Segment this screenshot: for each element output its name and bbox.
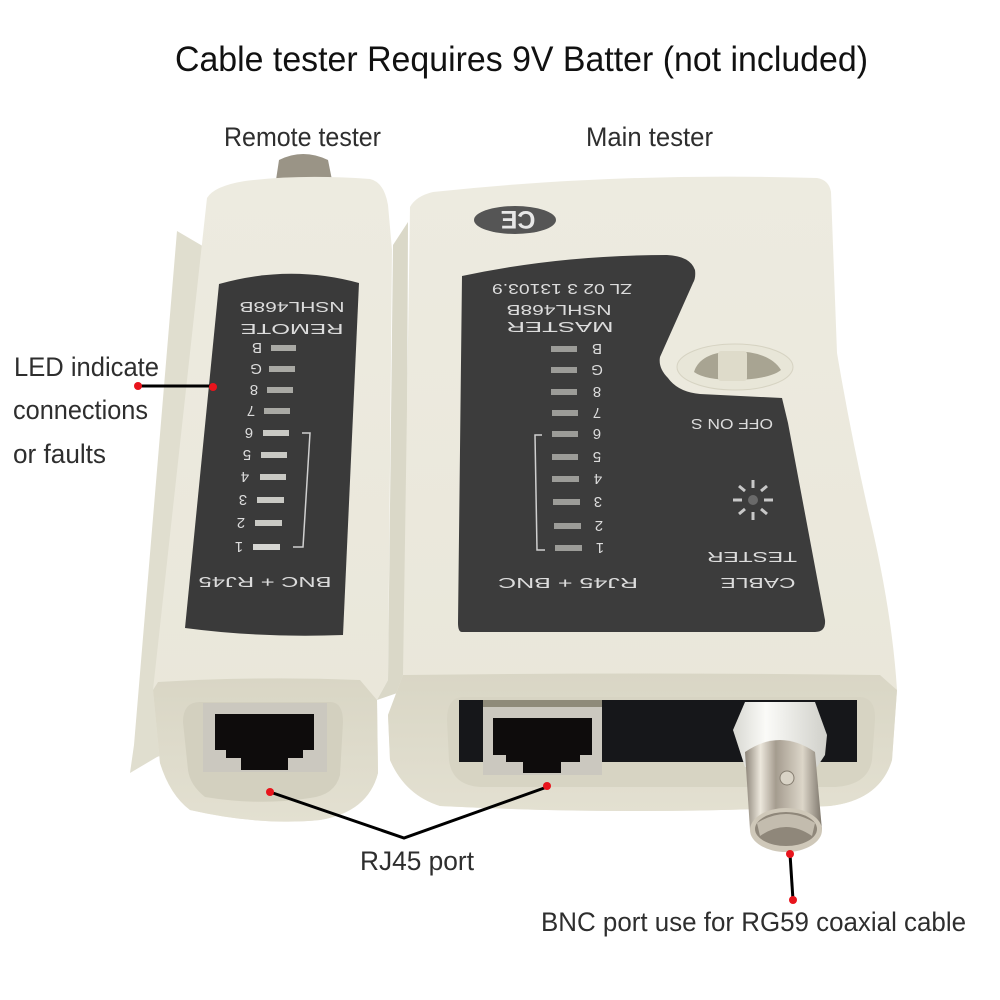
remote LED labels: B [252, 339, 262, 356]
remote RJ45 socket [183, 702, 343, 802]
CE mark [474, 205, 556, 234]
label: remote tester: Remote tester [224, 122, 381, 152]
remote LED labels: 3 [239, 491, 247, 508]
RJ45 text: RJ45 port [360, 846, 474, 876]
main LED labels: B [592, 340, 602, 357]
remote LED labels: 1 [235, 538, 243, 555]
remote LED labels: 2 [237, 514, 245, 531]
main LED labels: 3 [594, 493, 602, 510]
remote panel text: BNC + RJ45 [198, 573, 332, 590]
remote LED labels: 8 [250, 381, 258, 398]
main LED labels: G [591, 361, 603, 378]
remote tester device [130, 154, 392, 822]
LED callout text [13, 352, 159, 469]
callout: LED [13, 352, 217, 469]
main panel text: MASTER [506, 318, 614, 335]
main panel text: ZL 02 3 13103.9 [492, 280, 632, 297]
main panel text: OFF ON S [691, 415, 773, 432]
main LED labels: 4 [594, 470, 602, 487]
main panel text: TESTER [707, 548, 797, 565]
remote panel text: NSHL468B [240, 298, 344, 315]
power slider [677, 344, 793, 390]
LED callout leader [134, 382, 217, 391]
callout: RJ45 port [266, 782, 551, 876]
main panel text: RJ45 + BNC [498, 574, 638, 591]
main panel text: NSHL468B [506, 301, 612, 318]
main RJ45 socket [483, 700, 602, 775]
remote label panel [185, 274, 359, 636]
remote side flap [130, 231, 206, 773]
main LED rows [551, 346, 582, 551]
callout: BNC port [541, 850, 966, 937]
main LED labels: 2 [595, 517, 603, 534]
LED callout text: LED indicate [14, 352, 159, 382]
indicator light icon [733, 480, 773, 520]
main LED labels: 7 [593, 404, 601, 421]
main tester device [377, 177, 897, 852]
CE mark: CE [501, 205, 535, 233]
main LED labels [591, 340, 604, 556]
label: main tester: Main tester [586, 122, 713, 152]
remote panel text: REMOTE [240, 320, 344, 337]
title: Cable tester Requires 9V Batter (not included) [175, 40, 868, 79]
main front face [388, 674, 897, 811]
BNC leader [786, 850, 797, 904]
remote LED rows [253, 345, 296, 550]
main LED labels: 8 [593, 383, 601, 400]
main label panel [458, 255, 825, 632]
main body [388, 177, 897, 811]
port window [447, 697, 875, 787]
remote LED labels: 6 [245, 424, 253, 441]
BNC text: BNC port use for RG59 coaxial cable [541, 907, 966, 937]
main panel text [492, 280, 797, 591]
remote LED labels: 7 [247, 402, 255, 419]
remote LED labels [235, 339, 262, 555]
remote LED labels: G [250, 360, 262, 377]
BNC connector [733, 702, 827, 852]
LED callout text: connections [13, 395, 148, 425]
main LED labels: 1 [596, 539, 604, 556]
remote body [153, 177, 392, 822]
main panel text: CABLE [720, 574, 796, 591]
LED callout text: or faults [13, 439, 106, 469]
remote panel text [198, 298, 344, 590]
remote LED labels: 4 [241, 468, 249, 485]
main left side strip [377, 222, 408, 700]
main bracket [535, 435, 545, 550]
RJ45 leader [266, 782, 551, 838]
main LED labels: 5 [593, 448, 601, 465]
remote LED labels: 5 [243, 446, 251, 463]
remote BNC stub [276, 154, 332, 180]
main LED labels: 6 [593, 425, 601, 442]
remote bracket [293, 433, 310, 547]
remote front face [153, 678, 378, 822]
